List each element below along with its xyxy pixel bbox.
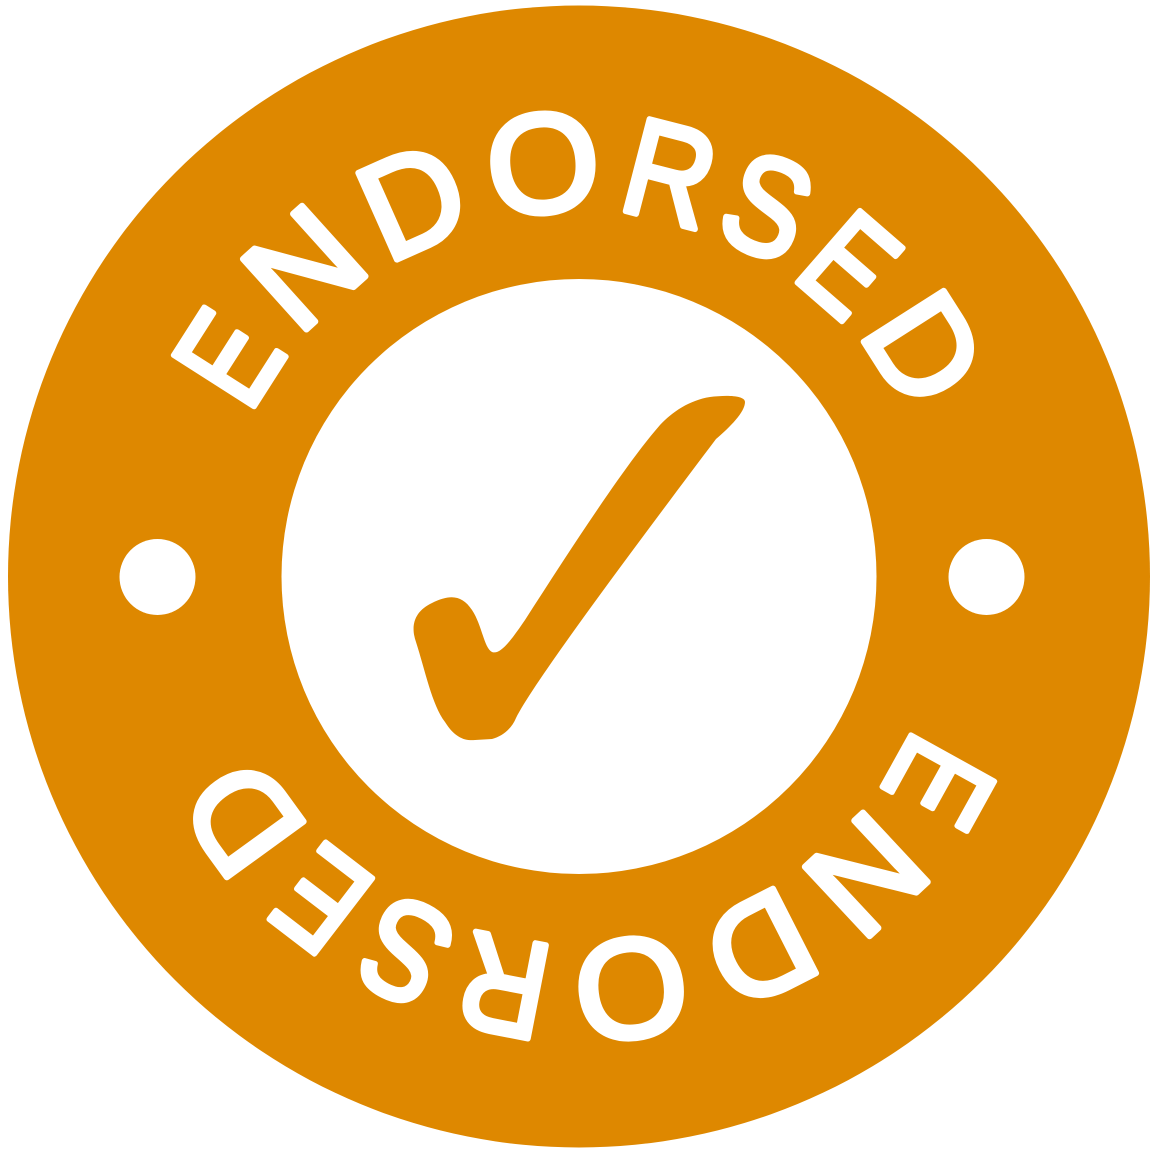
top curved text: ENDORSED: O bbox=[480, 81, 606, 247]
bottom inverted text: ENDORSED: E bbox=[854, 713, 1024, 851]
top curved text: ENDORSED bbox=[145, 81, 1016, 432]
bottom inverted text: ENDORSED: R bbox=[446, 901, 562, 1070]
left dot bbox=[120, 539, 196, 615]
bottom inverted text: ENDORSED: D bbox=[681, 857, 839, 1039]
top curved text: ENDORSED: S bbox=[701, 119, 834, 294]
top curved text: ENDORSED: D bbox=[832, 266, 1016, 432]
bottom inverted text: ENDORSED bbox=[151, 713, 1024, 1072]
right dot bbox=[948, 539, 1024, 615]
top curved text: ENDORSED: D bbox=[336, 110, 490, 292]
bottom inverted text: ENDORSED: N bbox=[776, 783, 957, 966]
top curved text: ENDORSED: E bbox=[771, 183, 927, 347]
top curved text: ENDORSED: N bbox=[214, 176, 394, 359]
bottom inverted text: ENDORSED: S bbox=[334, 864, 477, 1040]
bottom inverted text: ENDORSED: D bbox=[151, 732, 335, 904]
top curved text: ENDORSED: E bbox=[145, 286, 314, 430]
top curved text: ENDORSED: R bbox=[608, 87, 732, 259]
bottom inverted text: ENDORSED: O bbox=[566, 903, 696, 1072]
bottom inverted text: ENDORSED: E bbox=[246, 816, 398, 982]
icon: check mark bbox=[414, 396, 745, 740]
inner white circle bbox=[282, 279, 876, 874]
